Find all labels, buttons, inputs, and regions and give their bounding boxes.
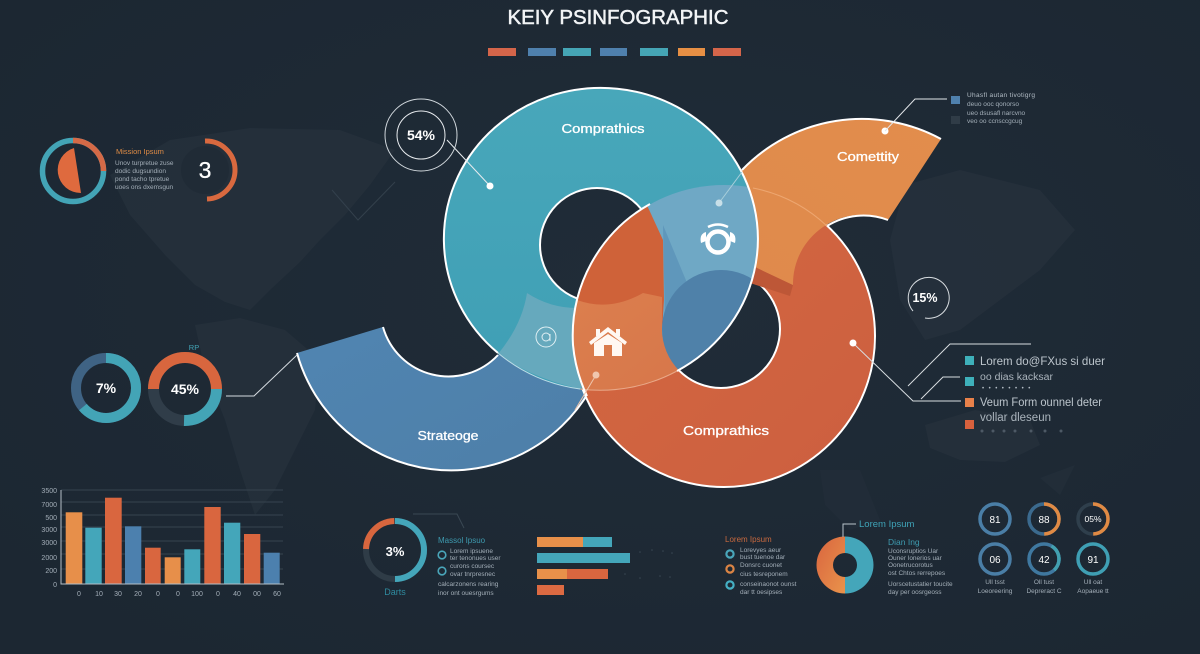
chart: half donut [816, 519, 915, 594]
title colour bars [488, 48, 741, 56]
text block: lorem list with markers [725, 535, 797, 596]
chart: number 3 arc: 3 [199, 157, 211, 183]
label: orange ring: Comettity [837, 149, 900, 164]
thin connector [413, 514, 464, 528]
text block: dodic dugsundion [115, 168, 166, 175]
y axis labels: 2000 [41, 555, 57, 562]
chart: 3% donut [365, 520, 425, 597]
chart: horizontal bars [537, 537, 673, 595]
central interlocking rings diagram [297, 88, 941, 487]
callout: right legend: Veum Form ounnel deter [980, 395, 1102, 409]
callout: blue ring leader [226, 355, 297, 396]
x axis labels: 30 [114, 591, 122, 598]
y axis labels: 3000 [41, 527, 57, 534]
ring: orange arc [730, 119, 941, 296]
text block: pond tacho tpretue [115, 176, 170, 183]
callout: top-right legend [882, 92, 1035, 134]
text block: centre-bottom list [438, 536, 501, 597]
faint map lines [332, 182, 395, 220]
ring captions: Ull tsst [985, 579, 1005, 586]
callout: right legend: vollar dleseun [980, 412, 1051, 424]
chart: 45% donut: 45% [171, 381, 200, 397]
callout: right legend: •••••••• [982, 386, 1035, 392]
ring captions: Ull oat [1084, 579, 1102, 586]
chart: 7% donut [76, 358, 136, 418]
text block: donut notes: Uconsruptios Uar [888, 548, 939, 555]
heading: Mission Ipsum [116, 147, 164, 156]
ring: teal arc [444, 88, 758, 390]
text block: donut notes [888, 537, 953, 596]
ring: 91: 91 [1087, 555, 1099, 566]
y axis labels: 3000 [41, 540, 57, 547]
ring outlines [444, 88, 758, 396]
text block: donut notes: day per oosrgeoss [888, 589, 942, 596]
ring captions: Depreract C [1026, 588, 1062, 595]
text block: donut notes: Uorscetustatier toucite [888, 581, 953, 588]
callout: 15% circle: 15% [912, 291, 938, 305]
text block: centre-bottom list: ter tenonues user [450, 555, 501, 562]
leader lines [853, 343, 1031, 401]
callout: right legend: Lorem do@FXus si duer [980, 354, 1105, 368]
title: KEIY PSINFOGRAPHIC [508, 6, 729, 29]
text block: centre-bottom list: ovar tnrpresnec [450, 571, 496, 578]
label: blue ring: Strateoge [418, 428, 478, 443]
x axis labels [77, 591, 281, 598]
ring: 05%: 05% [1084, 514, 1102, 524]
text block: lorem list with markers: cius tesreponem [740, 571, 788, 578]
callout: 54% circle: 54% [407, 127, 436, 143]
x axis labels: 0 [156, 591, 160, 598]
x axis labels: 0 [77, 591, 81, 598]
chart: donut with pie [42, 140, 104, 202]
overlap: teal and blue lens [498, 293, 582, 389]
ring: 81: 81 [989, 515, 1001, 526]
x axis labels: 10 [95, 591, 103, 598]
x axis labels: 60 [273, 591, 281, 598]
x axis labels: 0 [216, 591, 220, 598]
callout: 15% circle [908, 277, 949, 318]
text block: centre-bottom list: inor ont ouesrgums [438, 590, 494, 597]
chart: 3% donut: 3% [386, 544, 405, 559]
y axis labels [41, 488, 57, 589]
text block: centre-bottom list: Massol Ipsuo [438, 536, 486, 545]
callout: teal dot line to 54% [447, 140, 494, 190]
callout: right legend [850, 340, 1105, 432]
x axis labels: 00 [253, 591, 261, 598]
callout: top-right legend: Uhasfl autan tivotigrg [967, 92, 1035, 99]
text block: lorem list with markers: dar tt oesipses [740, 589, 783, 596]
text block: centre-bottom list: Lorem ipsuene [450, 548, 493, 555]
icon: robot ring [701, 224, 735, 252]
ring: 06: 06 [989, 555, 1001, 566]
chart: 45% donut: RP [189, 343, 199, 352]
callout: top-right legend: deuo ooc qonorso [967, 101, 1019, 108]
marker: lower lens dot [575, 372, 600, 410]
text block: donut notes: ost Chtos rerrepoes [888, 570, 946, 577]
grid lines [61, 490, 283, 569]
label: red ring: Comprathics [683, 423, 770, 438]
text block: donut notes: Oonetrucorotus [888, 562, 934, 569]
y axis labels: 500 [45, 515, 57, 522]
text block: lorem list with markers: Donsrc cuonet [740, 562, 782, 569]
ring captions: Aopaeue tt [1077, 588, 1109, 595]
text block: centre-bottom list: calcarzonens rearing [438, 581, 499, 588]
ring captions: Loeoreering [978, 588, 1013, 595]
x axis labels: 20 [134, 591, 142, 598]
panel: top-left donut and text [42, 140, 174, 202]
text block: lorem list with markers: Lorevyes aeur [740, 547, 782, 554]
ring captions: Oll tust [1034, 579, 1054, 586]
chart: bar chart [41, 488, 284, 598]
callout: right legend: oo dias kacksar [980, 372, 1054, 383]
chart: half donut: Lorem Ipsum [859, 519, 915, 530]
ring captions [978, 579, 1109, 595]
text block: Unov turpretue zuse [115, 160, 174, 167]
ring: red arc [573, 185, 875, 487]
text block: donut notes: Dian Ing [888, 537, 920, 547]
y axis labels: 7000 [41, 502, 57, 509]
label: teal ring: Comprathics [562, 121, 645, 136]
ring: 42: 42 [1038, 555, 1050, 566]
marker: upper lens dot [716, 172, 742, 206]
small rings grid [978, 504, 1109, 595]
icon: at sign circle [536, 327, 556, 347]
y axis labels: 3500 [41, 488, 57, 495]
callout: top-right legend: ueo dsusafl narcvno [967, 110, 1026, 117]
text block: uoes ons dxemsgun [115, 184, 174, 191]
y axis labels: 0 [53, 582, 57, 589]
text block: centre-bottom list: curons coursec [450, 563, 495, 570]
text block [115, 160, 174, 191]
chart: number 3 arc [181, 141, 235, 199]
y axis labels: 200 [45, 568, 57, 575]
chart: 45% donut [154, 343, 216, 420]
text block: lorem list with markers: conseinaonot ounst [740, 581, 797, 588]
text block: lorem list with markers: Lorem Ipsum [725, 535, 772, 544]
x axis labels: 100 [191, 591, 203, 598]
icon: house [589, 327, 627, 356]
callout: top-right legend: veo oo ccnsccgcug [967, 118, 1023, 125]
x axis labels: 0 [176, 591, 180, 598]
chart: 3% donut: Darts [384, 587, 406, 597]
ring: blue strategy arc [297, 300, 590, 470]
text block: donut notes: Ouner lonerios uar [888, 555, 943, 562]
callout: 54% circle [385, 99, 457, 171]
text block: lorem list with markers: bust tuenoe dar [740, 554, 786, 561]
x axis labels: 40 [233, 591, 241, 598]
chart: 7% donut: 7% [96, 380, 117, 396]
overlap: teal and red [574, 185, 757, 390]
world map backdrop [110, 128, 1075, 530]
ring: 88: 88 [1038, 515, 1050, 526]
